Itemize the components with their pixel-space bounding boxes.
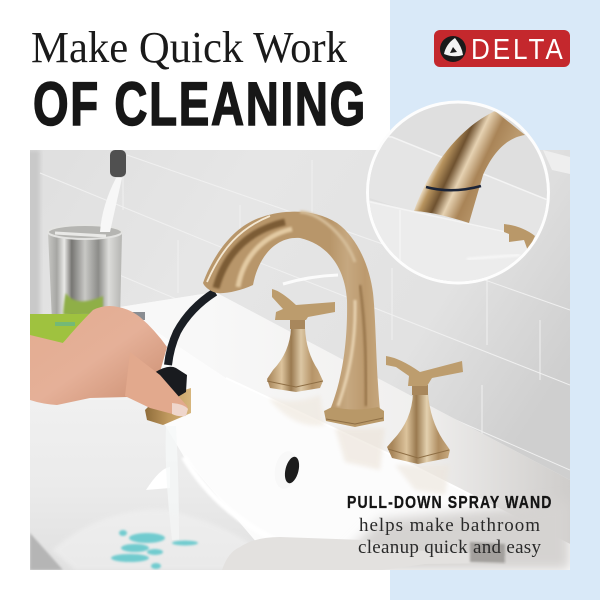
black hose xyxy=(168,292,215,365)
green tube xyxy=(30,312,145,343)
title: Make Quick Work xyxy=(31,23,347,72)
cup xyxy=(48,225,122,322)
logo: Delta xyxy=(434,30,570,67)
overflow drain xyxy=(284,456,300,484)
spray wand head xyxy=(145,388,191,425)
caption: PULL-DOWN SPRAY WAND xyxy=(347,492,551,512)
left handle xyxy=(267,289,335,392)
caption xyxy=(347,492,551,558)
callout: spout detail circle xyxy=(366,100,550,284)
water splash xyxy=(58,540,244,568)
caption: cleanup quick and easy xyxy=(358,537,542,558)
right handle xyxy=(386,356,463,464)
counter and basin xyxy=(30,292,570,570)
handle detail xyxy=(504,224,535,251)
faucet spout xyxy=(203,212,384,427)
thumb xyxy=(125,364,188,416)
wall tiles xyxy=(30,150,570,480)
caption: helps make bathroom xyxy=(359,515,540,536)
teal toothpaste xyxy=(111,530,198,569)
toothbrush in cup xyxy=(100,150,126,232)
water stream xyxy=(166,435,178,514)
wand collar xyxy=(154,367,187,398)
hand xyxy=(30,306,172,406)
photo: bathroom sink xyxy=(26,150,570,570)
title xyxy=(31,23,365,139)
spout close-up xyxy=(414,111,525,223)
blue side panel xyxy=(390,0,600,600)
logo: Delta: DELTA xyxy=(471,33,563,65)
title: OF CLEANING xyxy=(33,71,365,139)
brush on counter xyxy=(222,537,505,570)
